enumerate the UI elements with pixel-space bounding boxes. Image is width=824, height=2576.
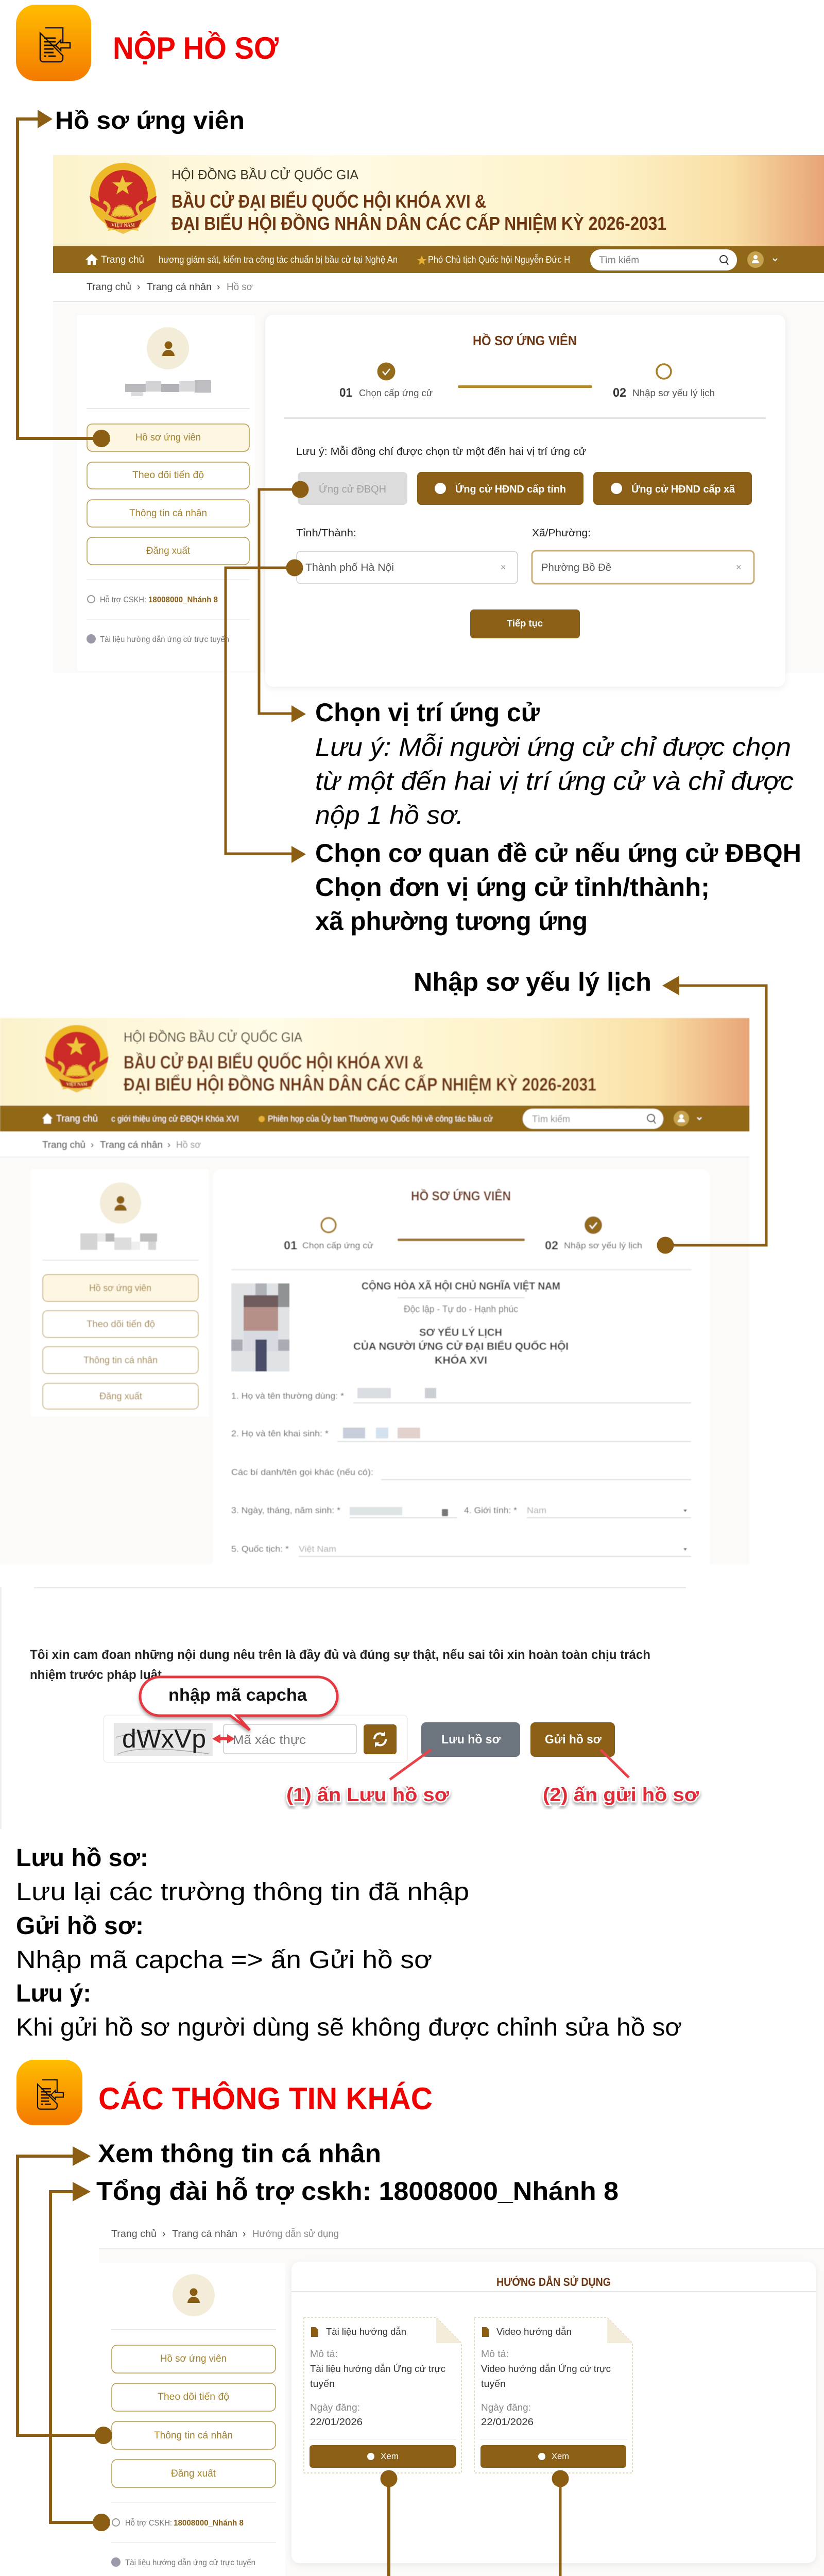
- text block: notes on saving and submitting: Nhập mã capcha => ấn Gửi hồ sơ: [16, 1946, 432, 1974]
- breadcrumb: [0, 1140, 749, 1158]
- stepper: 02: [613, 386, 626, 400]
- menu button: Theo dõi tiến độ: Theo dõi tiến độ: [132, 470, 204, 481]
- website banner: ĐẠI BIỂU HỘI ĐỒNG NHÂN DÂN CÁC CẤP NHIỆM KỲ 2026-2031: [124, 1074, 596, 1095]
- province select: ×: [501, 562, 506, 572]
- breadcrumb: Trang chủ: [42, 1140, 85, 1150]
- menu button: Đăng xuất: Đăng xuất: [171, 2468, 216, 2479]
- province select: Thành phố Hà Nội: [305, 562, 394, 573]
- main form card: Lưu ý: Mỗi đồng chí được chọn từ một đến hai vị trí ứng cử: [296, 446, 586, 457]
- text block: Chọn cơ quan đề cử: [315, 839, 801, 936]
- screenshot: declaration and captcha: [0, 1587, 699, 1829]
- annotation: (1) ấn Lưu hồ sơ: (1) ấn Lưu hồ sơ: [286, 1784, 450, 1805]
- screenshot: candidate profile step 2: [0, 1018, 749, 1564]
- title: CÁC THÔNG TIN KHÁC: [98, 2081, 433, 2116]
- form fields: 4. Giới tính: *: [464, 1505, 517, 1515]
- screenshot: candidate profile step 1: [53, 155, 824, 687]
- continue button: [470, 609, 580, 638]
- menu button: Hồ sơ ứng viên: Hồ sơ ứng viên: [89, 1283, 151, 1293]
- captcha box: Mã xác thực: [233, 1733, 306, 1747]
- connector: Xem tài liệu hướng dẫn: [165, 2470, 398, 2576]
- annotation: (1) ấn Lưu hồ sơ: [286, 1750, 450, 1805]
- navigation bar: [53, 246, 824, 273]
- website banner: HỘI ĐỒNG BẦU CỬ QUỐC GIA: [124, 1029, 303, 1045]
- ward select: Xã/Phường:: [532, 528, 591, 539]
- website banner: [0, 1018, 749, 1106]
- form header: KHÓA XVI: [435, 1354, 487, 1366]
- document card: Video hướng dẫn: Video hướng dẫn Ứng cử trực: [481, 2363, 611, 2374]
- form header: Độc lập - Tự do - Hạnh phúc: [404, 1304, 518, 1314]
- support hotline: 18008000_Nhánh 8: [174, 2519, 244, 2528]
- guide link: Tài liệu hướng dẫn ứng cử trực tuyến: [100, 634, 229, 644]
- text block: notes on saving and submitting: Lưu ý:: [16, 1980, 91, 2007]
- connector: Xem thông tin cá nhân: [18, 2146, 112, 2444]
- button: Gửi hồ sơ: Gửi hồ sơ: [545, 1733, 602, 1747]
- breadcrumb: ›: [167, 1140, 170, 1150]
- blurred photo: [231, 1283, 289, 1371]
- navigation bar: Phó Chủ tịch Quốc hội Nguyễn Đức H: [428, 254, 570, 265]
- menu button: Theo dõi tiến độ: Theo dõi tiến độ: [158, 2392, 229, 2402]
- support hotline: Hỗ trợ CSKH:: [125, 2518, 172, 2528]
- navigation bar: Phiên họp của Ủy ban Thường vụ Quốc hội về công tác bầu cử: [268, 1114, 493, 1124]
- stepper: Chọn cấp ứng cử: [359, 388, 433, 398]
- title: NỘP HỒ SƠ: [113, 31, 279, 65]
- document card: Video hướng dẫn: tuyến: [481, 2379, 506, 2389]
- heading: Hồ sơ ứng viên: Hồ sơ ứng viên: [55, 107, 245, 134]
- main form card: [213, 1170, 710, 1564]
- annotation: (2) ấn gửi hồ sơ: [543, 1750, 699, 1805]
- province select: [296, 528, 518, 584]
- website banner: BẦU CỬ ĐẠI BIỂU QUỐC HỘI KHÓA XVI &: [124, 1052, 423, 1073]
- navigation bar: c giới thiệu ứng cử ĐBQH Khóa XVI: [111, 1114, 239, 1124]
- option: Ứng cử HĐND cấp tỉnh: Ứng cử HĐND cấp tỉnh: [455, 483, 566, 495]
- form fields: Việt Nam: [299, 1544, 336, 1554]
- stepper: [284, 1216, 642, 1252]
- breadcrumb: ›: [243, 2229, 246, 2240]
- form header: CỘNG HÒA XÃ HỘI CHỦ NGHĨA VIỆT NAM: [362, 1280, 560, 1292]
- menu button: Theo dõi tiến độ: [87, 462, 249, 489]
- menu button: Hồ sơ ứng viên: Hồ sơ ứng viên: [160, 2353, 227, 2364]
- breadcrumb: ›: [217, 282, 220, 293]
- support hotline: 18008000_Nhánh 8: [148, 596, 218, 604]
- breadcrumb: Hồ sơ: [176, 1140, 201, 1150]
- menu button: Theo dõi tiến độ: [112, 2383, 276, 2411]
- text block: notes on saving and submitting: Gửi hồ sơ:: [16, 1912, 144, 1940]
- stepper: [339, 363, 715, 400]
- main card: [291, 2262, 816, 2563]
- navigation bar: hương giám sát, kiểm tra công tác chuẩn bị bầu cử tại Nghệ An: [159, 255, 398, 265]
- avatar: [100, 1182, 141, 1224]
- heading: Nhập sơ yếu lý lịch: Nhập sơ yếu lý lịch: [414, 968, 651, 996]
- option: Ứng cử ĐBQH: Ứng cử ĐBQH: [319, 483, 386, 495]
- breadcrumb: Trang cá nhân: [172, 2229, 237, 2240]
- menu button: Hồ sơ ứng viên: [43, 1275, 198, 1301]
- document card: Tài liệu hướng dẫn: 22/01/2026: [310, 2417, 363, 2427]
- connector: Xem video hướng dẫn: [551, 2470, 571, 2576]
- support hotline: [88, 595, 218, 604]
- ward select: ×: [736, 562, 742, 572]
- breadcrumb: ›: [137, 282, 140, 293]
- ward select: Phường Bồ Đề: [541, 562, 611, 573]
- sidebar: [111, 2274, 276, 2567]
- text block: notes on saving and submitting: Khi gửi hồ sơ người dùng sẽ không được chỉnh sửa hồ sơ: [16, 2014, 682, 2041]
- screenshot: user guide page: [99, 2228, 824, 2576]
- form fields: 1. Họ và tên thường dùng: *: [231, 1391, 344, 1401]
- document card: Tài liệu hướng dẫn: Ngày đăng:: [310, 2402, 360, 2413]
- main form card: HỒ SƠ ỨNG VIÊN: [473, 333, 577, 348]
- form fields: 2. Họ và tên khai sinh: *: [231, 1429, 329, 1438]
- support hotline: Hỗ trợ CSKH:: [100, 595, 146, 604]
- form header: [353, 1280, 569, 1366]
- option: Ứng cử HĐND cấp xã: [593, 472, 752, 505]
- arrow: captcha double arrow: [212, 1734, 235, 1743]
- declaration text: nhiệm trước pháp luật: [30, 1668, 162, 1682]
- website banner: BẦU CỬ ĐẠI BIỂU QUỐC HỘI KHÓA XVI &: [171, 190, 486, 212]
- icon: document: [16, 2060, 82, 2125]
- form fields: 3. Ngày, tháng, năm sinh: *: [231, 1505, 340, 1515]
- breadcrumb: [53, 282, 824, 302]
- document card: Tài liệu hướng dẫn: Tài liệu hướng dẫn Ứng cử trực: [310, 2363, 445, 2374]
- website banner: VIỆT NAM: [111, 223, 135, 228]
- form fields: 5. Quốc tịch: *: [231, 1544, 289, 1554]
- main card: HƯỚNG DẪN SỬ DỤNG: [496, 2275, 611, 2289]
- continue button: Tiếp tục: [507, 618, 543, 629]
- document card: Video hướng dẫn: Ngày đăng:: [481, 2402, 531, 2413]
- menu button: Thông tin cá nhân: Thông tin cá nhân: [83, 1355, 158, 1365]
- menu button: Đăng xuất: Đăng xuất: [99, 1391, 142, 1401]
- navigation bar: Tìm kiếm: [599, 255, 639, 266]
- text block: Chọn cơ quan đề cử: Chọn đơn vị ứng cử tỉnh/thành;: [315, 873, 710, 902]
- text block: Chọn vị trí ứng cử: nộp 1 hồ sơ.: [315, 801, 464, 829]
- section heading: Các thông tin khác: [16, 2060, 433, 2125]
- connector: Tổng đài hỗ trợ: [50, 2182, 110, 2531]
- breadcrumb: Trang cá nhân: [100, 1140, 163, 1150]
- section heading: Nộp hồ sơ: [16, 5, 279, 81]
- menu button: Đăng xuất: Đăng xuất: [146, 546, 191, 556]
- button: Gửi hồ sơ: [530, 1722, 615, 1757]
- guide link: Tài liệu hướng dẫn ứng cử trực tuyến: [125, 2557, 255, 2567]
- menu button: Thông tin cá nhân: Thông tin cá nhân: [129, 508, 207, 519]
- support hotline: [112, 2518, 244, 2528]
- blurred name: [80, 1233, 157, 1250]
- breadcrumb: Hướng dẫn sử dụng: [252, 2228, 339, 2240]
- website banner: [53, 155, 824, 246]
- menu button: Đăng xuất: [87, 537, 249, 565]
- avatar: [147, 327, 189, 369]
- connector: Chọn cơ quan đề cử: [226, 560, 306, 863]
- blurred name: [125, 380, 211, 396]
- menu button: Hồ sơ ứng viên: [87, 424, 249, 451]
- menu button: Theo dõi tiến độ: Theo dõi tiến độ: [87, 1319, 155, 1329]
- text block: Chọn vị trí ứng cử: Chọn vị trí ứng cử: [315, 698, 540, 727]
- main form card: [265, 315, 785, 687]
- menu button: Đăng xuất: [43, 1383, 198, 1409]
- form fields: Nam: [527, 1505, 546, 1515]
- connector: Chọn vị trí ứng cử: [259, 481, 309, 722]
- text block: notes on saving and submitting: Lưu hồ sơ:: [16, 1844, 148, 1872]
- text block: Chọn cơ quan đề cử: Chọn cơ quan đề cử nếu ứng cử ĐBQH: [315, 839, 801, 868]
- website banner: HỘI ĐỒNG BẦU CỬ QUỐC GIA: [171, 166, 359, 182]
- document card: Video hướng dẫn: Xem: [552, 2451, 569, 2461]
- document card: Video hướng dẫn: Mô tả:: [481, 2349, 509, 2359]
- stepper: 02: [545, 1239, 558, 1252]
- button: Lưu hồ sơ: Lưu hồ sơ: [441, 1733, 501, 1747]
- menu button: Hồ sơ ứng viên: Hồ sơ ứng viên: [135, 432, 201, 443]
- callout: nhập mã capcha: [140, 1677, 337, 1730]
- navigation bar: [0, 1106, 749, 1131]
- province select: Tỉnh/Thành:: [296, 528, 356, 539]
- stepper: Chọn cấp ứng cử: [302, 1241, 373, 1250]
- captcha box: [104, 1715, 407, 1762]
- sidebar: [42, 1182, 199, 1409]
- option: Ứng cử HĐND cấp xã: Ứng cử HĐND cấp xã: [631, 483, 735, 495]
- stepper: Nhập sơ yếu lý lịch: [632, 388, 715, 398]
- declaration text: Tôi xin cam đoan những nội dung nêu trên là đầy đủ và đúng sự thật, nếu sai tôi xin hoàn toàn chịu trách: [30, 1648, 650, 1662]
- label: Tổng đài hỗ trợ: Tổng đài hỗ trợ cskh: 18008000_Nhánh 8: [96, 2177, 619, 2206]
- text block: Chọn vị trí ứng cử: [315, 698, 794, 829]
- menu button: Thông tin cá nhân: Thông tin cá nhân: [154, 2430, 233, 2441]
- menu button: Thông tin cá nhân: [87, 500, 249, 527]
- sidebar: [87, 327, 250, 644]
- option: Ứng cử HĐND cấp tỉnh: [417, 472, 583, 505]
- document card: Tài liệu hướng dẫn: Xem: [381, 2451, 399, 2461]
- menu button: Đăng xuất: [112, 2460, 276, 2487]
- breadcrumb: ›: [91, 1140, 94, 1150]
- connector: Nhập sơ yếu lý lịch: [657, 976, 766, 1254]
- main form card: HỒ SƠ ỨNG VIÊN: [411, 1188, 511, 1204]
- document card: Tài liệu hướng dẫn: Mô tả:: [310, 2349, 338, 2359]
- stepper: Nhập sơ yếu lý lịch: [564, 1241, 642, 1250]
- document card: Video hướng dẫn: 22/01/2026: [481, 2417, 534, 2427]
- breadcrumb: Trang chủ: [111, 2229, 157, 2240]
- navigation bar: Trang chủ: [56, 1113, 98, 1124]
- breadcrumb: Trang cá nhân: [147, 282, 212, 293]
- captcha box: dWxVp: [122, 1724, 206, 1753]
- button: Lưu hồ sơ: [421, 1722, 520, 1757]
- breadcrumb: Trang chủ: [87, 282, 131, 293]
- text block: notes on saving and submitting: [16, 1844, 682, 2041]
- menu button: Theo dõi tiến độ: [43, 1311, 198, 1337]
- annotation: (2) ấn gửi hồ sơ: (2) ấn gửi hồ sơ: [543, 1784, 699, 1805]
- text block: Chọn vị trí ứng cử: từ một đến hai vị trí ứng cử và chỉ được: [315, 767, 794, 795]
- menu button: Thông tin cá nhân: [112, 2421, 276, 2449]
- document card: Tài liệu hướng dẫn: tuyến: [310, 2379, 335, 2389]
- form fields: Các bí danh/tên gọi khác (nếu có):: [231, 1467, 373, 1477]
- menu button: Hồ sơ ứng viên: [112, 2345, 276, 2373]
- document card: Tài liệu hướng dẫn: Tài liệu hướng dẫn: [326, 2326, 406, 2337]
- avatar: [173, 2274, 215, 2316]
- website banner: ĐẠI BIỂU HỘI ĐỒNG NHÂN DÂN CÁC CẤP NHIỆM KỲ 2026-2031: [171, 212, 666, 234]
- label: Xem thông tin cá nhân: Xem thông tin cá nhân: [98, 2139, 381, 2168]
- text block: Chọn vị trí ứng cử: Lưu ý: Mỗi người ứng cử chỉ được chọn: [315, 733, 791, 761]
- document card: Tài liệu hướng dẫn: [304, 2317, 461, 2473]
- text block: notes on saving and submitting: Lưu lại các trường thông tin đã nhập: [16, 1878, 469, 1906]
- navigation bar: Trang chủ: [101, 255, 144, 265]
- breadcrumb: Hồ sơ: [227, 282, 253, 293]
- document card: Video hướng dẫn: [474, 2317, 632, 2473]
- connector: Hồ sơ ứng viên: [18, 110, 110, 447]
- breadcrumb: [99, 2228, 824, 2249]
- form fields: [231, 1388, 691, 1557]
- option: Ứng cử ĐBQH: [298, 472, 407, 505]
- declaration text: [30, 1648, 650, 1682]
- text block: Chọn cơ quan đề cử: xã phường tương ứng: [315, 907, 588, 936]
- navigation bar: Tìm kiếm: [532, 1114, 570, 1124]
- callout: nhập mã capcha: nhập mã capcha: [168, 1685, 307, 1704]
- stepper: 01: [284, 1239, 297, 1252]
- form header: CỦA NGƯỜI ỨNG CỬ ĐẠI BIỂU QUỐC HỘI: [353, 1340, 569, 1352]
- form header: SƠ YẾU LÝ LỊCH: [419, 1326, 502, 1338]
- website banner: VIỆT NAM: [66, 1082, 88, 1087]
- document card: Video hướng dẫn: Video hướng dẫn: [496, 2326, 572, 2337]
- breadcrumb: ›: [162, 2229, 165, 2240]
- stepper: 01: [339, 386, 352, 400]
- menu button: Thông tin cá nhân: [43, 1347, 198, 1374]
- icon: document submit: [16, 5, 91, 81]
- ward select: [532, 528, 754, 584]
